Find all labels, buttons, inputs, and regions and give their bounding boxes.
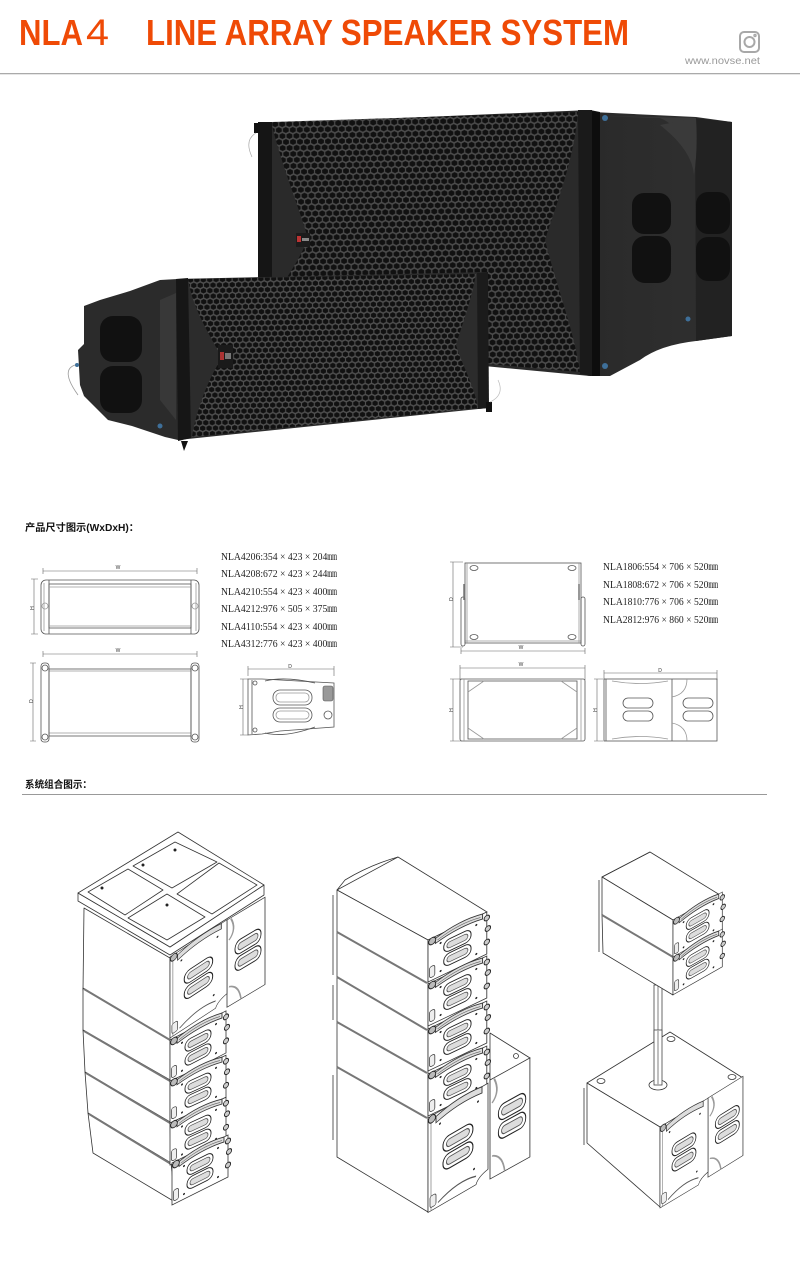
heading: system combinations: 系统组合图示： — [25, 778, 92, 791]
upper cabinets — [599, 852, 725, 995]
drawing: front view: W — [116, 565, 121, 571]
photo: speakers — [68, 105, 732, 451]
drawing: sub top view: D — [449, 597, 455, 601]
drawing: top view — [29, 648, 199, 742]
rear cabinet — [227, 897, 265, 1007]
module 3 — [428, 997, 491, 1071]
drawing: top view: D — [29, 699, 35, 703]
drawing: sub front view: H — [449, 708, 455, 712]
top rigging frame — [78, 832, 264, 955]
small line array module — [68, 272, 500, 451]
heading: product dimensions: 产品尺寸图示(WxDxH)： — [25, 521, 139, 534]
panel: NLA4 dimensions — [29, 552, 337, 742]
module 4 — [428, 1042, 491, 1116]
front cabinet — [170, 918, 227, 1038]
drawing: sub front view: W — [519, 662, 524, 668]
title: NLA: NLA — [19, 12, 83, 53]
drawing: side view: H — [239, 705, 245, 709]
drawing: sub top view: W — [519, 645, 524, 651]
left faces and top — [333, 857, 487, 1212]
spec: NLA1808: NLA1808:672 × 706 × 520㎜ — [603, 580, 718, 591]
diagram: ground stack on subwoofer — [333, 857, 530, 1212]
title: series number: 4 — [86, 12, 109, 53]
panel: NLA1 and NLA2 dimensions — [449, 562, 718, 741]
drawing: sub top view — [449, 562, 585, 654]
diagram: flown array with frame — [78, 832, 265, 1205]
drawing: sub side view: H — [593, 708, 599, 712]
icon: camera logo — [740, 32, 759, 52]
spec: NLA2812: NLA2812:976 × 860 × 520㎜ — [603, 615, 718, 626]
pole — [654, 985, 662, 1085]
drawing: front view — [30, 565, 199, 634]
large subwoofer — [249, 105, 732, 380]
drawing: top view: W — [116, 648, 121, 654]
spec: NLA4210: NLA4210:554 × 423 × 400㎜ — [221, 587, 337, 598]
title: product name: LINE ARRAY SPEAKER SYSTEM — [146, 12, 629, 53]
logo badge — [296, 233, 310, 247]
module 1 — [428, 908, 491, 982]
spec: NLA4110: NLA4110:554 × 423 × 400㎜ — [221, 622, 337, 633]
drawing: sub front view — [449, 662, 585, 741]
front subwoofer — [428, 1082, 488, 1212]
module 2 — [428, 952, 491, 1026]
subwoofer top and left face — [584, 1032, 743, 1207]
spec: NLA4212: NLA4212:976 × 505 × 375㎜ — [221, 604, 337, 615]
rear section — [708, 1076, 743, 1177]
diagram: pole mounted system — [584, 852, 743, 1208]
drawing: front view: H — [30, 606, 36, 610]
module 2 — [170, 1052, 230, 1123]
left faces — [83, 908, 175, 1202]
drawing: sub side view — [593, 668, 717, 741]
spec: NLA1810: NLA1810:776 × 706 × 520㎜ — [603, 597, 718, 608]
spec: NLA4312: NLA4312:776 × 423 × 400㎜ — [221, 639, 337, 650]
front section — [660, 1097, 708, 1208]
module 3 — [170, 1094, 230, 1165]
pole flange — [649, 1030, 667, 1090]
spec: NLA4206: NLA4206:354 × 423 × 204㎜ — [221, 552, 337, 563]
drawing: side view: D — [288, 664, 292, 670]
drawing: sub side view: D — [658, 668, 662, 674]
spec: NLA1806: NLA1806:554 × 706 × 520㎜ — [603, 562, 718, 573]
header: title and brand — [19, 12, 760, 67]
spec: NLA4208: NLA4208:672 × 423 × 244㎜ — [221, 569, 337, 580]
spec list: NLA4 models — [221, 552, 337, 650]
logo badge — [218, 345, 233, 368]
module 1 — [170, 1007, 230, 1082]
drawing: side view — [239, 664, 334, 735]
website: www.novse.net — [684, 55, 760, 67]
spec list: NLA1 and NLA2 models — [603, 562, 718, 626]
rear subwoofer — [490, 1033, 530, 1179]
module 4 — [172, 1131, 232, 1205]
